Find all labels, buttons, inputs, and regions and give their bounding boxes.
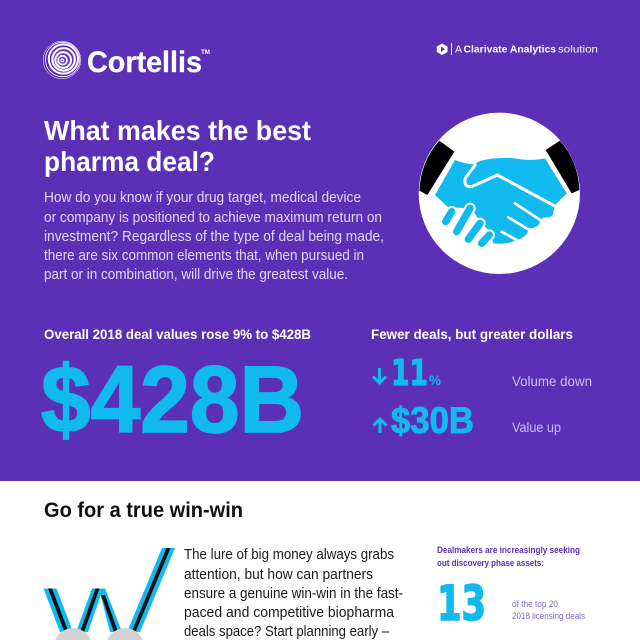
- number: $30B: $30B: [391, 400, 474, 441]
- percent sign: %: [429, 372, 442, 388]
- panel: white section: [0, 481, 640, 640]
- intro text block: investment? Regardless of the type of deal being made,: [44, 229, 384, 245]
- icon: handshake: [419, 113, 580, 274]
- brand text: solution: solution: [558, 44, 598, 56]
- intro text block: part or in combination, will drive the greatest value.: [44, 267, 348, 283]
- icon: Clarivate mark: [437, 44, 448, 55]
- trademark: TM: [201, 50, 210, 56]
- intro text block: How do you know if your drug target, medical device: [44, 190, 361, 206]
- body text: win-win: attention, but how can partners: [184, 566, 373, 583]
- brand text: A: A: [455, 44, 462, 56]
- intro text block: there are six common elements that, when pursued in: [44, 248, 364, 264]
- sidebar caption: [512, 599, 585, 621]
- title: [44, 115, 311, 177]
- icon: spiral logo: [43, 41, 81, 79]
- body text: win-win: The lure of big money always grabs: [184, 546, 394, 563]
- body text: win-win: ensure a genuine win-win in the fast-: [184, 585, 403, 602]
- brand line: Clarivate Analytics: [437, 43, 598, 56]
- sidebar caption: 2018 licensing deals: [512, 611, 585, 621]
- label: value up: Value up: [512, 419, 561, 435]
- heading: overall deal values: Overall 2018 deal values rose 9% to $428B: [44, 326, 311, 342]
- heading: go for a true win-win: Go for a true win-win: [44, 499, 243, 522]
- stat: volume down: [373, 353, 592, 394]
- body text: win-win: paced and competitive biopharma: [184, 604, 395, 621]
- big number: 13: 13: [437, 576, 486, 632]
- intro text block: [44, 190, 384, 283]
- icon: down arrow: [373, 368, 386, 383]
- sidebar heading: discovery phase assets: [437, 545, 580, 568]
- intro text block: or company is positioned to achieve maximum return on: [44, 210, 382, 226]
- heading: fewer deals: Fewer deals, but greater dollars: [371, 326, 573, 342]
- divider bar: [450, 43, 453, 55]
- icon: up arrow: [374, 419, 386, 433]
- panel: purple header: [0, 0, 640, 481]
- title: What makes the best: [44, 115, 311, 146]
- logo: Cortellis: [43, 41, 210, 79]
- sidebar caption: of the top 20: [512, 599, 558, 609]
- sidebar heading: discovery phase assets: out discovery phase assets:: [437, 558, 544, 568]
- logo wordmark: Cortellis: [87, 46, 202, 79]
- title: pharma deal?: [44, 146, 215, 177]
- body text: win-win: [184, 546, 403, 640]
- body text: win-win: deals space? Start planning early –: [184, 623, 390, 640]
- number: 11 percent: 11: [391, 353, 428, 394]
- big number: $428B: $428B: [41, 347, 304, 453]
- stat: value up: [374, 400, 561, 441]
- sidebar heading: discovery phase assets: Dealmakers are increasingly seeking: [437, 545, 580, 555]
- label: volume down: Volume down: [512, 373, 592, 389]
- brand text: Clarivate Analytics: Clarivate Analytics: [464, 44, 556, 56]
- icon: medals with ribbons: [44, 548, 175, 640]
